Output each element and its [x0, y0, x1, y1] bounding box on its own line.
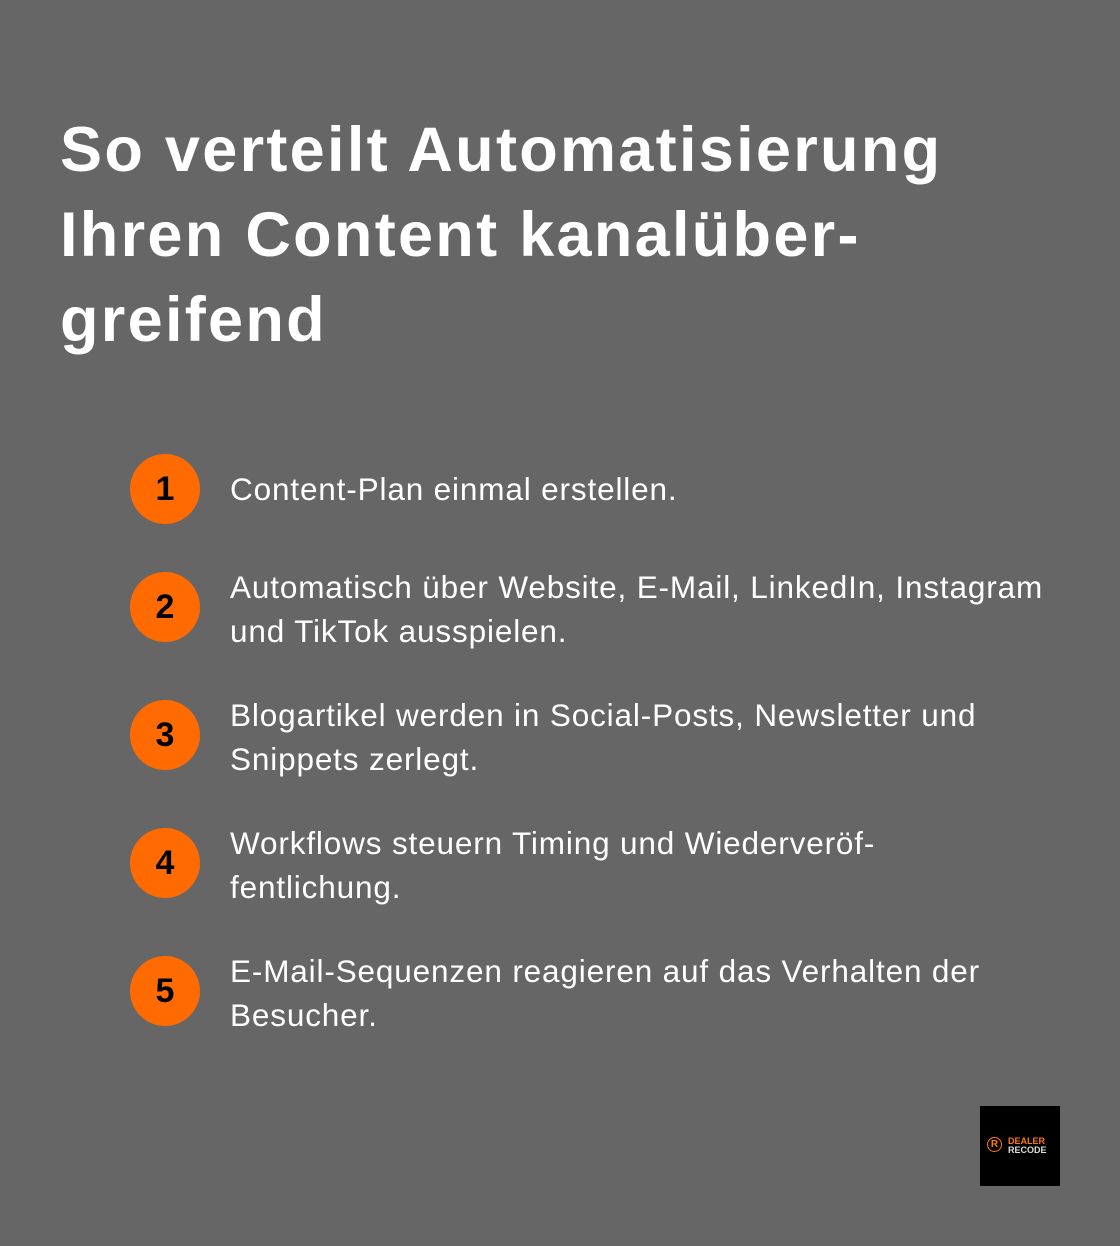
item 3: [130, 697, 976, 777]
logo text: [1008, 1136, 1047, 1155]
item 5: [130, 953, 980, 1033]
item 2: [130, 569, 1043, 649]
logo text: RECODE: [1008, 1145, 1047, 1155]
badge 1: 1: [156, 470, 174, 508]
text 2: Automatisch über Website, E-Mail, LinkedIn, Instagram: [230, 569, 1043, 605]
badge 1: [130, 454, 200, 524]
logo icon: [987, 1137, 1002, 1152]
text 5: [230, 953, 980, 1033]
text 3: Snippets zerlegt.: [230, 741, 479, 777]
text 5: E-Mail-Sequenzen reagieren auf das Verhalten der: [230, 953, 980, 989]
text 1: Content-Plan einmal erstellen.: [230, 471, 677, 507]
logo icon: R: [991, 1139, 998, 1150]
title: greifend: [60, 285, 327, 355]
text 3: [230, 697, 976, 777]
logo: [980, 1106, 1060, 1186]
text 4: Workflows steuern Timing und Wiederveröf-: [230, 825, 875, 861]
badge 4: 4: [156, 844, 174, 882]
badge 3: 3: [156, 716, 174, 754]
badge 5: [130, 956, 200, 1026]
badge 2: [130, 572, 200, 642]
item 1: [130, 454, 677, 524]
badge 3: [130, 700, 200, 770]
badge 5: 5: [156, 972, 174, 1010]
title: [60, 115, 942, 355]
text 5: Besucher.: [230, 997, 378, 1033]
text 4: [230, 825, 875, 905]
title: So verteilt Automatisierung: [60, 115, 942, 185]
logo text: DEALER: [1008, 1136, 1045, 1146]
title: Ihren Content kanalüber-: [60, 200, 861, 270]
badge 2: 2: [156, 588, 174, 626]
badge 4: [130, 828, 200, 898]
text 2: und TikTok ausspielen.: [230, 613, 567, 649]
text 4: fentlichung.: [230, 869, 401, 905]
text 2: [230, 569, 1043, 649]
text 3: Blogartikel werden in Social-Posts, Newsletter und: [230, 697, 976, 733]
item 4: [130, 825, 875, 905]
